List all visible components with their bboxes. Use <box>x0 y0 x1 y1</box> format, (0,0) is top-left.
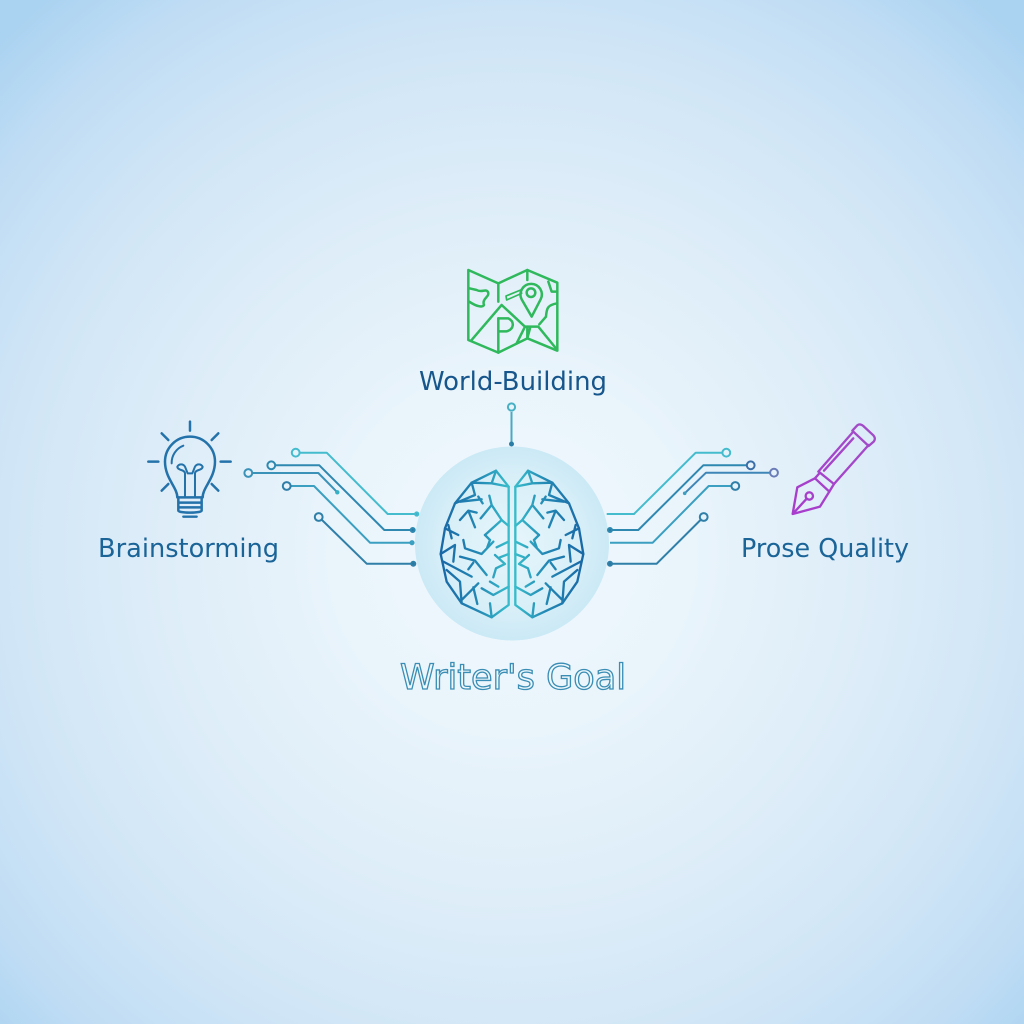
trace 1 <box>292 449 418 516</box>
label: World-Building: World-Building <box>419 367 607 397</box>
central brain disc <box>415 446 609 640</box>
icon: light bulb <box>148 422 231 517</box>
map pin <box>520 284 542 317</box>
trace 1 <box>607 449 730 514</box>
icon: world map <box>468 270 557 353</box>
circuit traces: right <box>607 449 778 566</box>
icon: fountain pen <box>793 424 875 514</box>
circuit traces: left <box>244 449 418 566</box>
trace 4 <box>283 482 414 544</box>
trace 3 <box>244 469 339 494</box>
label: Prose Quality: Prose Quality <box>741 534 909 564</box>
label: Brainstorming: Brainstorming <box>98 534 279 564</box>
trace 5 <box>315 513 415 566</box>
trace 2 <box>267 461 415 532</box>
icon: brain <box>441 471 583 617</box>
heading: Writer's Goal: Writer's Goal <box>400 658 626 698</box>
connector: top link to World-Building <box>508 403 515 446</box>
brain right hemisphere <box>515 471 583 617</box>
trace 4 <box>610 482 739 543</box>
trace 5 <box>608 513 708 566</box>
brain left hemisphere <box>441 471 509 617</box>
trace 3 <box>683 469 778 495</box>
trace 2 <box>608 461 755 532</box>
